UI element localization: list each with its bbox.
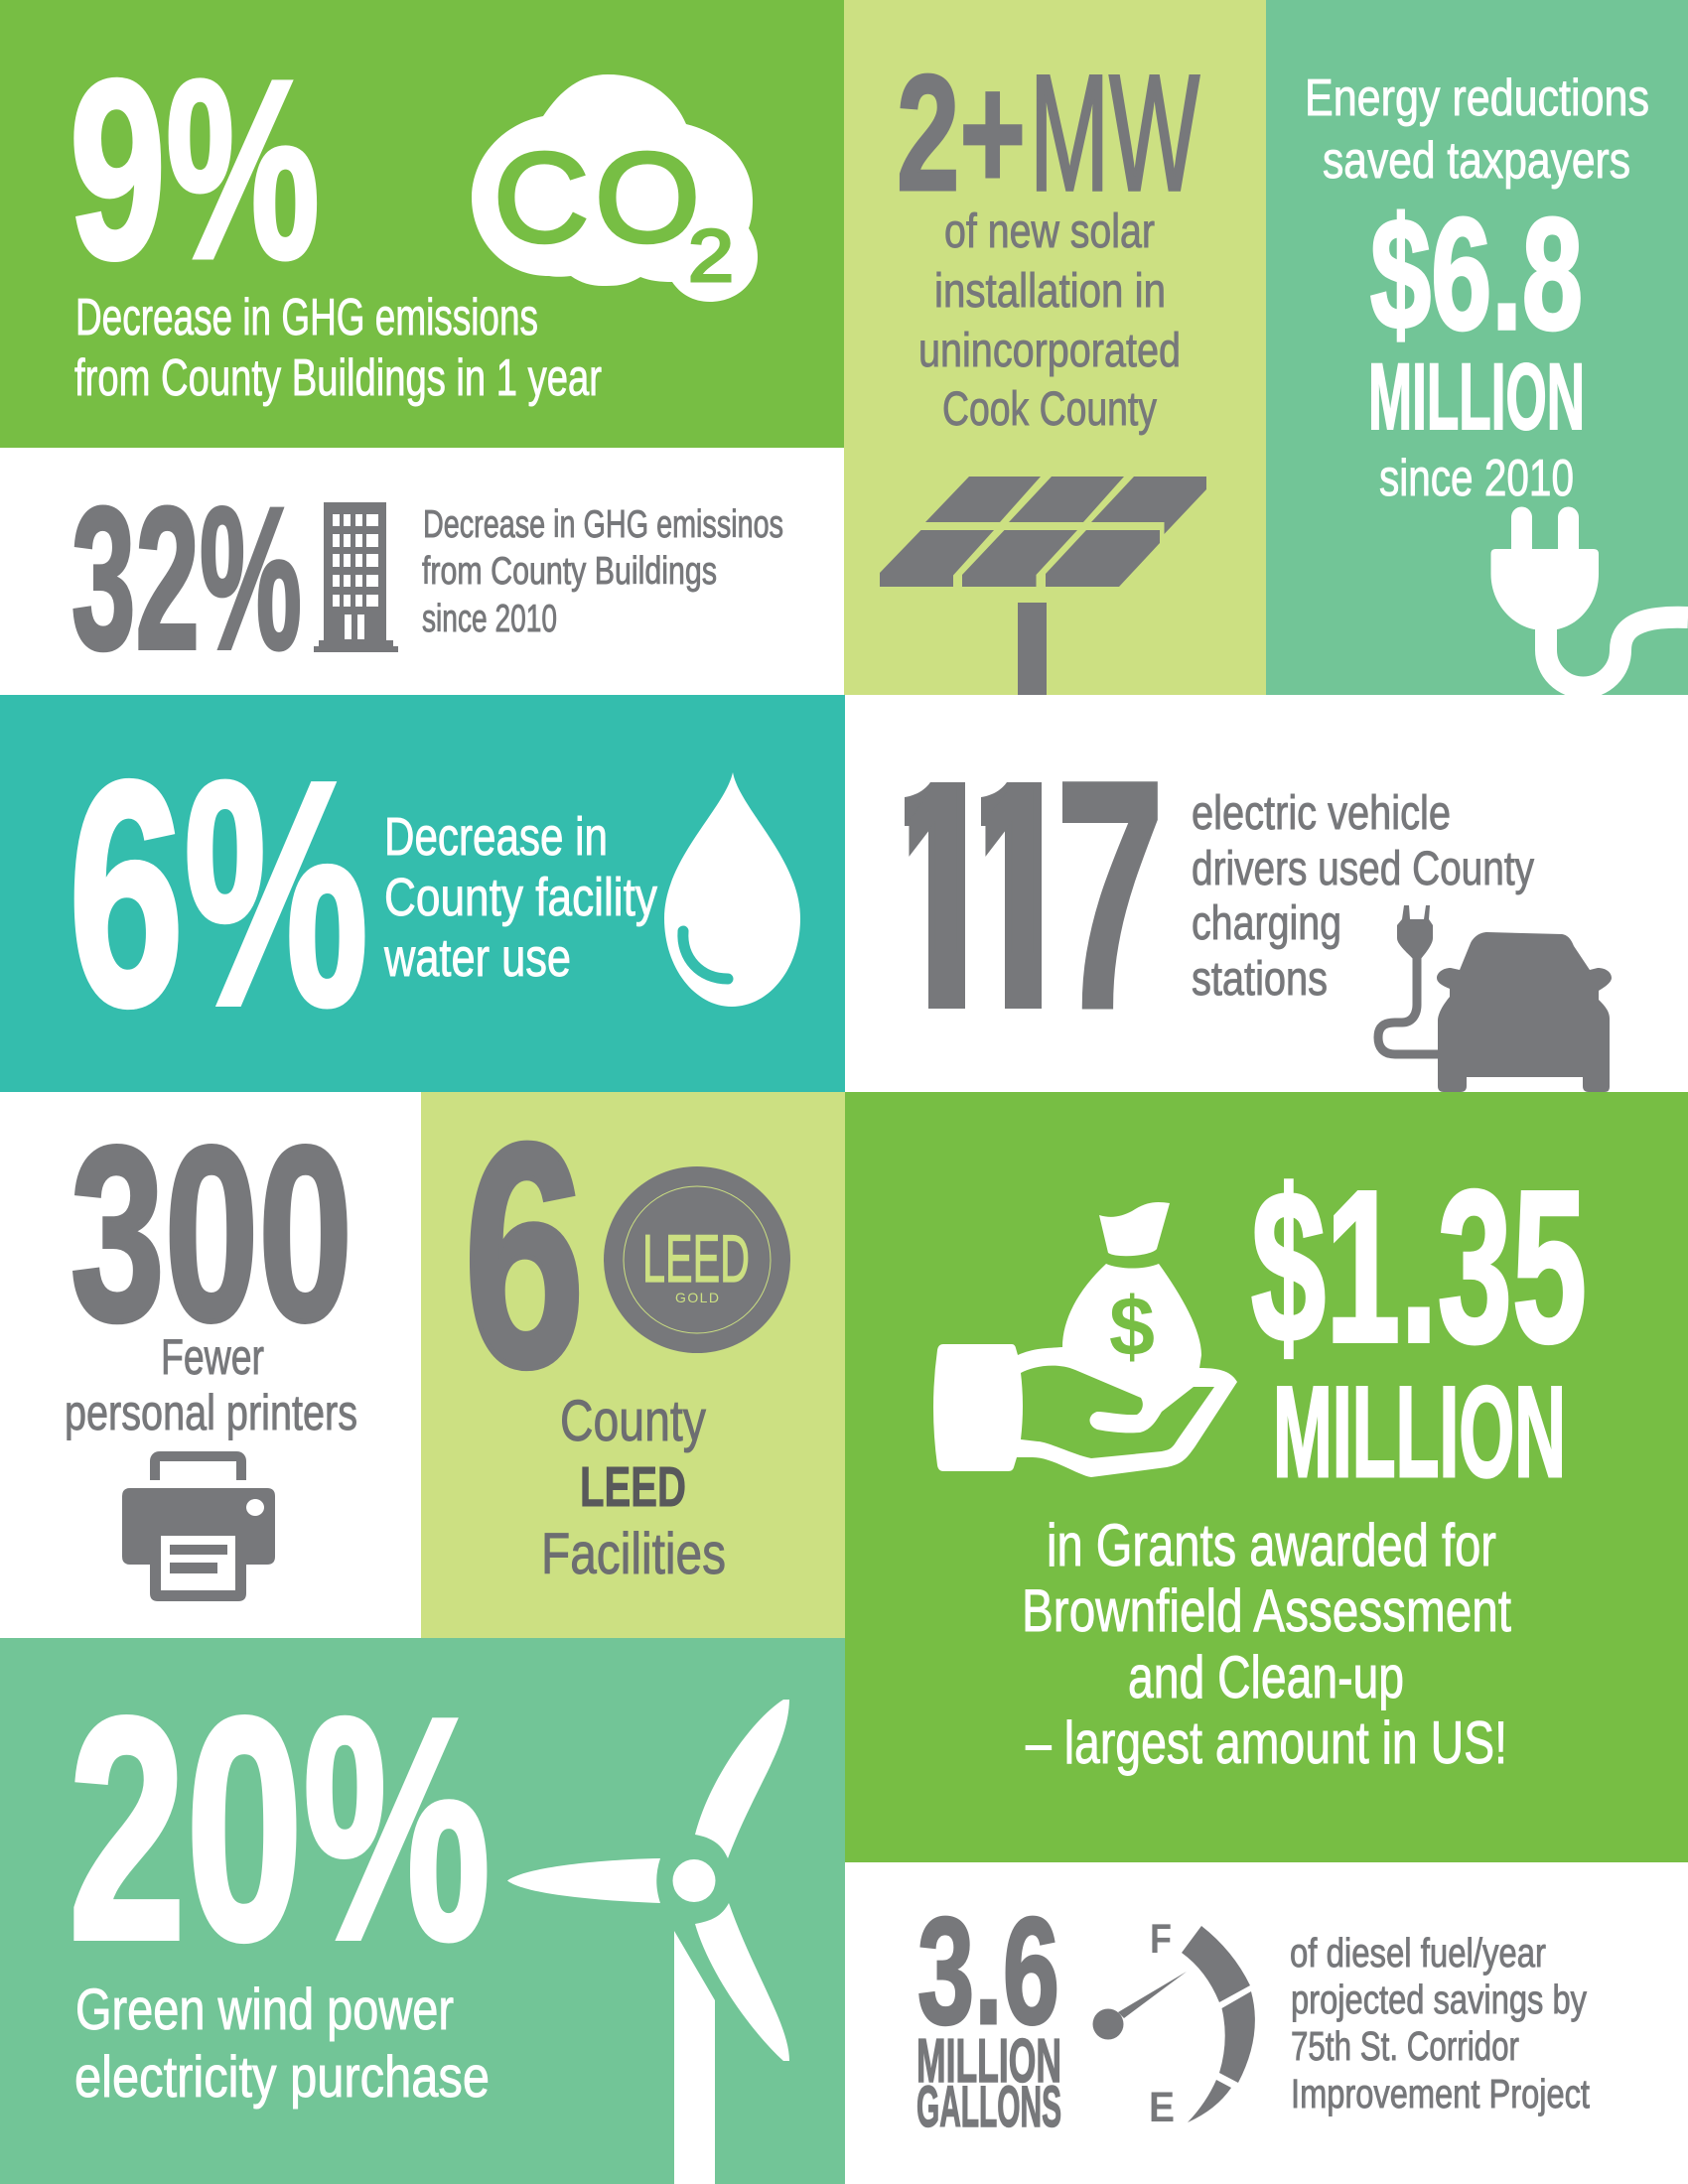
icon: water drop bbox=[664, 772, 800, 1007]
panel: 9 percent GHG decrease bbox=[0, 0, 845, 448]
text: solar caption: unincorporated bbox=[918, 325, 1181, 377]
stat: 117: 1 bbox=[899, 712, 986, 1078]
text: LEED caption: County bbox=[560, 1389, 706, 1453]
panel: 32 percent buildings bbox=[0, 448, 845, 695]
text: LEED caption: Facilities bbox=[541, 1522, 726, 1586]
text: buildings caption: Decrease in GHG emissinos bbox=[423, 503, 783, 546]
text: buildings caption: since 2010 bbox=[422, 598, 557, 640]
text: printers caption: personal printers bbox=[65, 1385, 357, 1440]
stat: 117 bbox=[905, 781, 1158, 1009]
text: diesel caption bbox=[1290, 1930, 1590, 2116]
text: grants caption: in Grants awarded for bbox=[1047, 1512, 1496, 1578]
text: solar caption bbox=[918, 205, 1181, 436]
text: solar caption: of new solar bbox=[944, 205, 1155, 258]
icon: hand holding money bag bbox=[933, 1202, 1237, 1477]
panel: LEED facilities bbox=[421, 1077, 845, 1638]
stat: 2+MW: 2+ bbox=[897, 42, 1026, 225]
text: grants caption bbox=[1022, 1512, 1511, 1776]
stat: 3.6: 3.6 bbox=[917, 1886, 1059, 2056]
icon: plug bbox=[1491, 506, 1688, 687]
stat: 20%: 20% bbox=[69, 1653, 491, 2005]
text: wind caption: electricity purchase bbox=[74, 2045, 490, 2110]
icon: hand holding money bag: $ bbox=[1109, 1280, 1155, 1373]
icon: wind turbine bbox=[507, 1700, 789, 2184]
text: water caption: County facility bbox=[384, 868, 657, 927]
text: EV caption: charging bbox=[1192, 897, 1341, 950]
text: printers caption bbox=[65, 1329, 357, 1440]
text: EV caption: drivers used County bbox=[1192, 843, 1534, 895]
text: LEED caption bbox=[541, 1389, 726, 1586]
icon: electric car with plug bbox=[1378, 905, 1612, 1092]
text: since 2010: since 2010 bbox=[1379, 450, 1574, 507]
text: water caption: water use bbox=[383, 928, 571, 988]
text: EV caption bbox=[1192, 787, 1534, 1006]
text: water caption: Decrease in bbox=[384, 807, 608, 867]
icon: CO2 cloud: C bbox=[493, 127, 589, 269]
stat: 300: 300 bbox=[70, 1095, 352, 1372]
text: buildings caption: from County Buildings bbox=[422, 550, 717, 593]
text: diesel caption: projected savings by bbox=[1291, 1977, 1587, 2022]
stat: 2+MW bbox=[897, 42, 1199, 225]
text: GHG decrease caption: from County Buildings in 1 year bbox=[74, 349, 602, 407]
panel: EV charging bbox=[905, 781, 1612, 1092]
text: wind caption bbox=[74, 1978, 490, 2110]
text: GHG decrease caption bbox=[74, 289, 602, 407]
text: EV caption: electric vehicle bbox=[1192, 787, 1451, 840]
stat: 32%: 32% bbox=[71, 466, 302, 692]
stat: MILLION GALLONS bbox=[916, 2027, 1061, 2139]
icon: LEED gold badge: GOLD bbox=[675, 1290, 719, 1305]
icon: CO2 cloud: O bbox=[595, 127, 700, 269]
text: GHG decrease caption: Decrease in GHG emissions bbox=[75, 289, 538, 346]
stat: 117: 1 bbox=[975, 712, 1062, 1078]
text: LEED caption: LEED bbox=[580, 1455, 686, 1519]
stat: 117: 7 bbox=[1055, 715, 1165, 1076]
text: diesel caption: Improvement Project bbox=[1291, 2071, 1590, 2116]
panel: diesel savings bbox=[845, 1862, 1688, 2184]
text: buildings caption bbox=[422, 503, 783, 640]
icon: CO2 cloud: 2 bbox=[688, 214, 734, 297]
text: solar caption: installation in bbox=[934, 265, 1166, 318]
text: grants caption: – largest amount in US! bbox=[1026, 1709, 1507, 1776]
icon: printer bbox=[122, 1456, 275, 1601]
panel: 2+ MW solar bbox=[844, 0, 1266, 695]
panel: brownfield grants bbox=[845, 1092, 1688, 1862]
text: EV caption: stations bbox=[1192, 953, 1328, 1006]
icon: LEED gold badge bbox=[604, 1166, 790, 1353]
icon: fuel gauge: F bbox=[1150, 1915, 1172, 1962]
text: wind caption: Green wind power bbox=[75, 1978, 454, 2042]
text: water caption bbox=[383, 807, 657, 988]
text: grants caption: and Clean-up bbox=[1128, 1644, 1404, 1710]
stat: 6%: 6% bbox=[69, 716, 368, 1072]
icon: solar panel bbox=[880, 477, 1206, 695]
icon: building bbox=[314, 502, 398, 652]
icon: CO2 cloud bbox=[472, 74, 758, 302]
text: grants caption: Brownfield Assessment bbox=[1022, 1577, 1511, 1644]
icon: LEED gold badge: LEED bbox=[642, 1221, 750, 1297]
text: printers caption: Fewer bbox=[161, 1329, 264, 1385]
text: energy reductions heading: saved taxpayers bbox=[1323, 132, 1630, 190]
text: solar caption: Cook County bbox=[942, 383, 1157, 436]
panel: energy reductions bbox=[1266, 0, 1688, 695]
panel: water use bbox=[0, 695, 845, 1092]
text: energy reductions heading bbox=[1305, 69, 1649, 190]
panel: wind power bbox=[0, 1638, 845, 2184]
stat: 6: 6 bbox=[464, 1077, 585, 1433]
text: diesel caption: 75th St. Corridor bbox=[1291, 2023, 1519, 2069]
text: diesel caption: of diesel fuel/year bbox=[1290, 1930, 1546, 1976]
stat: $6.8: $6.8 bbox=[1370, 185, 1583, 362]
stat: 2+MW: MW bbox=[1030, 42, 1199, 225]
panel: fewer printers bbox=[0, 1092, 421, 1638]
icon: fuel gauge bbox=[1092, 1915, 1255, 2131]
icon: fuel gauge: E bbox=[1149, 2084, 1175, 2131]
stat: MILLION GALLONS: MILLION bbox=[916, 2027, 1061, 2096]
stat: 9%: 9% bbox=[70, 28, 320, 312]
stat: MILLION GALLONS: GALLONS bbox=[916, 2075, 1061, 2139]
